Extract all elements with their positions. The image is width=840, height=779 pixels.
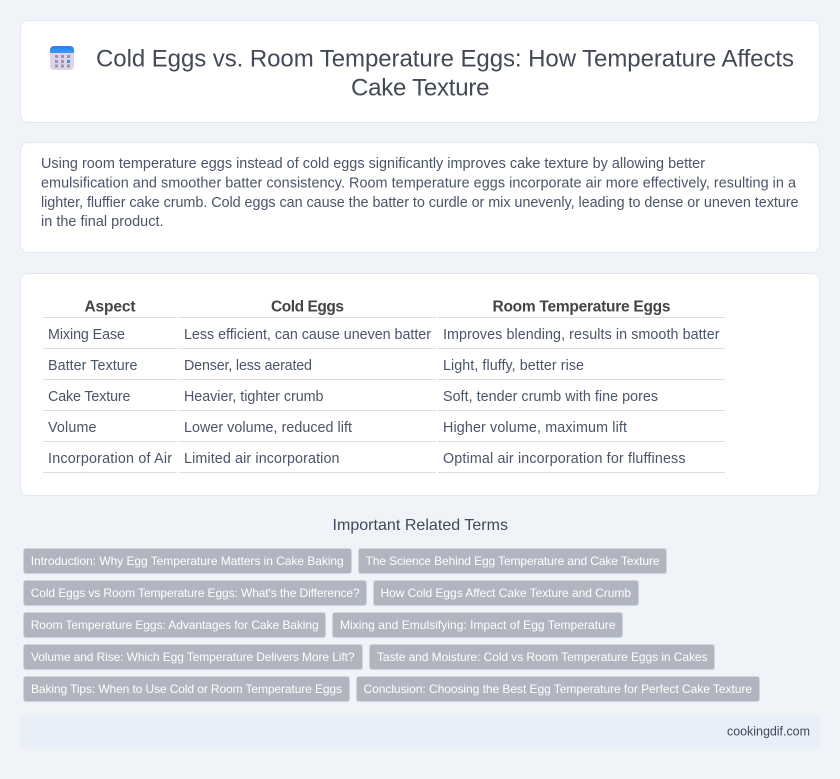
tag: mixing and emulsifying xyxy=(332,612,622,638)
tag: taste and moisture xyxy=(370,644,714,670)
row: cake texture: Cake Texture xyxy=(48,389,131,405)
tag: taste and moisture: Taste and Moisture: Cold vs Room Temperature Eggs in Cakes xyxy=(377,650,708,664)
tag: introduction: Introduction: Why Egg Temperature Matters in Cake Baking xyxy=(31,554,344,568)
row: batter texture: Denser, less aerated xyxy=(184,358,312,374)
tag list: related terms xyxy=(24,548,760,702)
row: cake texture: Heavier, tighter crumb xyxy=(184,389,324,405)
panel: introduction xyxy=(20,142,820,252)
row: mixing ease xyxy=(48,327,720,343)
tag: the science xyxy=(358,548,666,574)
table: comparison of cold and room temperature eggs xyxy=(43,298,725,473)
row: volume: Volume xyxy=(48,420,97,436)
row: batter texture: Light, fluffy, better rise xyxy=(443,358,584,374)
table header row: Room Temperature Eggs xyxy=(492,298,670,316)
table header row: Cold Eggs xyxy=(271,298,344,316)
tag: cold eggs effect: How Cold Eggs Affect Cake Texture and Crumb xyxy=(380,586,631,600)
title: Cold Eggs vs. Room Temperature Eggs: How Temperature Affects xyxy=(96,46,794,72)
tag: conclusion: Conclusion: Choosing the Best Egg Temperature for Perfect Cake Texture xyxy=(364,682,752,696)
row: batter texture: Batter Texture xyxy=(48,358,138,374)
row: cake texture xyxy=(48,389,658,405)
tag: introduction xyxy=(24,548,352,574)
tag: advantages: Room Temperature Eggs: Advantages for Cake Baking xyxy=(31,618,319,632)
row: incorporation of air: Limited air incorporation xyxy=(184,451,340,467)
text block: introduction: lighter, fluffier cake crumb. Cold eggs can cause the batter to curdle or mix unevenly, leading to dense or uneven texture xyxy=(41,195,798,211)
tag: baking tips xyxy=(24,676,350,702)
row: volume: Lower volume, reduced lift xyxy=(184,420,352,436)
title xyxy=(96,46,794,102)
row: volume xyxy=(48,420,627,436)
row: volume: Higher volume, maximum lift xyxy=(443,420,627,436)
icon: calendar xyxy=(50,46,74,70)
table header row: Aspect xyxy=(84,298,136,316)
text block: introduction: in the final product. xyxy=(41,214,164,230)
tag: volume and rise xyxy=(24,644,362,670)
row: cake texture: Soft, tender crumb with fine pores xyxy=(443,389,658,405)
tag: cold eggs effect xyxy=(374,580,638,606)
tag: mixing and emulsifying: Mixing and Emulsifying: Impact of Egg Temperature xyxy=(340,618,616,632)
row: incorporation of air: Incorporation of Air xyxy=(48,451,172,467)
tag: conclusion xyxy=(356,676,760,702)
row: mixing ease: Less efficient, can cause uneven batter xyxy=(184,327,431,343)
heading: important related terms: Important Related Terms xyxy=(332,517,508,534)
tag: the science: The Science Behind Egg Temperature and Cake Texture xyxy=(366,554,660,568)
row: batter texture xyxy=(48,358,584,374)
tag: the difference: Cold Eggs vs Room Temperature Eggs: What's the Difference? xyxy=(31,586,360,600)
panel: title card xyxy=(20,20,820,122)
text block: introduction: emulsification and smoother batter consistency. Room temperature eggs incorporate air more effectively, resulting in a xyxy=(41,176,796,192)
tag: baking tips: Baking Tips: When to Use Cold or Room Temperature Eggs xyxy=(31,682,342,696)
footer: cookingdif.com xyxy=(727,724,810,738)
row: mixing ease: Mixing Ease xyxy=(48,327,125,343)
text block: introduction xyxy=(41,156,798,230)
row: incorporation of air xyxy=(48,451,686,467)
tag: advantages xyxy=(24,612,326,638)
table header row xyxy=(84,298,670,316)
text block: introduction: Using room temperature eggs instead of cold eggs significantly improves cake texture by allowing better xyxy=(41,156,705,172)
tag: the difference xyxy=(24,580,366,606)
tag: volume and rise: Volume and Rise: Which Egg Temperature Delivers More Lift? xyxy=(31,650,355,664)
row: mixing ease: Improves blending, results in smooth batter xyxy=(443,327,720,343)
title: Cake Texture xyxy=(351,74,490,102)
row: incorporation of air: Optimal air incorporation for fluffiness xyxy=(443,451,686,467)
footer xyxy=(20,715,820,749)
panel: comparison table xyxy=(20,274,820,496)
